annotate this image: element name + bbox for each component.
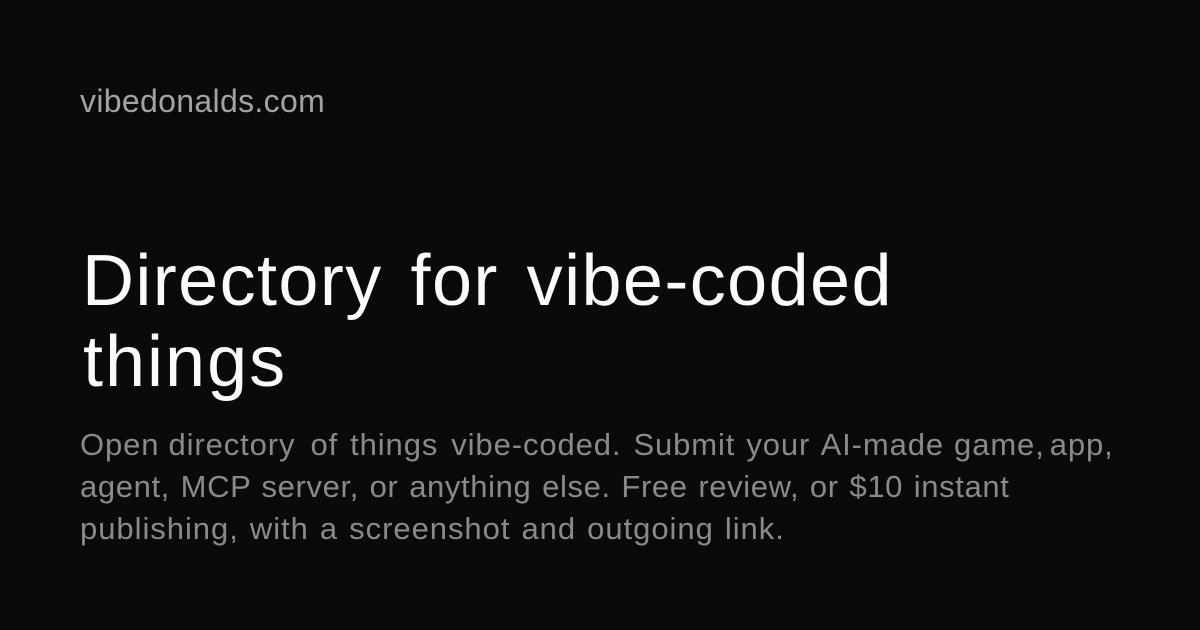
- title: [82, 241, 893, 402]
- description: agent, MCP server, or anything else. Free review, or $10 instant: [80, 469, 1009, 504]
- description: publishing, with a screenshot and outgoing link.: [80, 511, 785, 546]
- title: things: [83, 322, 287, 402]
- description: [80, 427, 1114, 546]
- description: Open directory of things vibe-coded. Submit your AI-made game, app,: [80, 427, 1114, 462]
- title: Directory for vibe-coded: [82, 241, 893, 321]
- site name: vibedonalds.com: [80, 83, 325, 119]
